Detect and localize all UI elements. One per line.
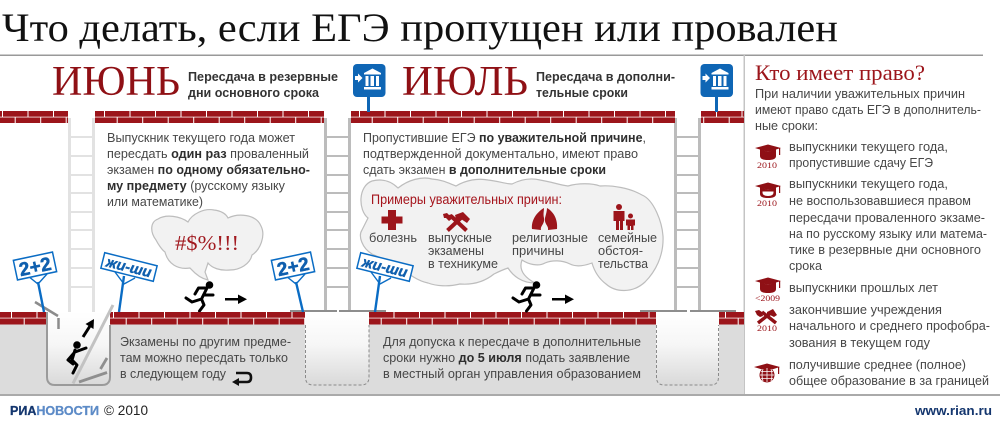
footer logo: РИАНОВОСТИ <box>10 403 99 418</box>
side intro: При наличии уважительных причин <box>755 86 965 101</box>
text block: July intro: Пропустившие ЕГЭ по уважительной причине, <box>363 130 646 145</box>
reason: family <box>598 230 657 271</box>
open hatch covers <box>290 310 736 312</box>
pit walls <box>47 312 110 385</box>
icon: education office sign 2 <box>700 64 733 112</box>
text block: June: или математике) <box>107 194 203 209</box>
June subtitle <box>188 70 338 100</box>
footer logo <box>10 403 148 418</box>
arrow 1 <box>225 294 247 304</box>
speech cloud: swearing <box>152 210 263 280</box>
text block: July intro: сдать экзамен в дополнительные сроки <box>363 162 606 177</box>
item: abroad: получившие среднее (полное) <box>789 357 966 372</box>
item: vocational: зования в текущем году <box>789 335 930 350</box>
icon: hammers 2010 <box>755 309 777 333</box>
reason: religious: причины <box>512 243 564 258</box>
item: unused right: пересдачи проваленного экзаме- <box>789 210 985 225</box>
title: Что делать, если ЕГЭ пропущен или провален <box>2 5 838 50</box>
item: unused right: на по русскому языку или матема- <box>789 226 987 241</box>
item: abroad <box>789 357 989 388</box>
text block: June: Выпускник текущего года может <box>107 130 295 145</box>
June subtitle: дни основного срока <box>188 86 320 100</box>
pit 3: dashed <box>656 312 719 385</box>
item: vocational: закончившие учреждения <box>789 302 942 317</box>
icon: cap 2010: 2010 <box>757 161 777 170</box>
bottom brick wall <box>0 312 744 324</box>
footer logo: © 2010 <box>104 403 148 418</box>
top brick wall <box>0 111 744 123</box>
reason: religious <box>512 230 588 258</box>
heading: June: ИЮНЬ <box>52 59 180 105</box>
icon: cross <box>382 210 402 230</box>
reason: technical school exams <box>428 230 498 271</box>
reason: religious: религиозные <box>512 230 588 245</box>
icon: return arrow <box>232 373 251 386</box>
text block: admission: Для допуска к пересдаче в дополнительные <box>383 334 641 349</box>
runner 2 <box>513 281 540 311</box>
sign: жи-ши left <box>101 253 157 312</box>
icon: hammers 2010: 2010 <box>757 324 777 333</box>
item: unused right: срока <box>789 258 823 273</box>
ladder: right <box>676 118 700 311</box>
icon: family <box>614 204 635 230</box>
arrow 2 <box>552 294 574 304</box>
item: unused right: выпускники текущего года, <box>789 176 948 191</box>
swearing text: #$%!!! <box>175 231 239 255</box>
side intro <box>755 86 981 133</box>
text block: admission: сроки нужно до 5 июля подать заявление <box>383 350 630 365</box>
text block: July intro: подтвержденной документально, имеют право <box>363 146 638 161</box>
text block: admission <box>383 334 641 381</box>
item: vocational <box>789 302 990 350</box>
reason: technical school exams: выпускные <box>428 230 492 245</box>
side intro: ные сроки: <box>755 118 818 133</box>
July subtitle: тельные сроки <box>536 86 628 100</box>
pit 2: dashed <box>305 312 369 385</box>
sign: 2+2 left: 2+2 <box>17 254 53 281</box>
item: unused right: тике в резервные дни основного <box>789 242 981 257</box>
item: unused right <box>789 176 987 273</box>
sign: жи-ши right <box>357 253 413 312</box>
icon: cap with blank 2010 <box>755 182 781 208</box>
sign: 2+2 left <box>13 252 57 312</box>
icon: hammers <box>443 212 470 230</box>
reason: family: обстоя- <box>598 243 643 258</box>
ground strip <box>0 324 744 394</box>
sign: 2+2 right: 2+2 <box>275 254 311 281</box>
text block: other subjects: Экзамены по другим предме- <box>120 334 291 349</box>
text block: June: экзамен по одному обязательно- <box>107 162 310 177</box>
heading: July: ИЮЛЬ <box>402 59 528 105</box>
July subtitle: Пересдача в дополни- <box>536 70 675 84</box>
icon: cap before 2009: <2009 <box>755 294 780 303</box>
speech cloud: valid reasons <box>360 178 663 290</box>
item: missed exam: пропустившие сдачу ЕГЭ <box>789 155 933 170</box>
cloud heading: Примеры уважительных причин: <box>371 192 562 207</box>
icon: cap with globe <box>754 364 780 382</box>
icon: cap with blank 2010: 2010 <box>757 199 777 208</box>
text block: June: пересдать один раз проваленный <box>107 146 309 161</box>
reason: illness: болезнь <box>369 230 417 245</box>
climbing figure <box>68 341 86 373</box>
icon: praying hands <box>532 208 557 230</box>
reason: family: тельства <box>598 256 649 271</box>
side heading: Кто имеет право? <box>755 60 925 85</box>
pit 1: open <box>47 312 110 385</box>
text block: other subjects <box>120 334 291 381</box>
icon: cap before 2009 <box>755 278 781 303</box>
text block: other subjects: там можно пересдать только <box>120 350 288 365</box>
text block: admission: в местный орган управления образованием <box>383 366 641 381</box>
ladder: middle <box>326 118 350 311</box>
icon: education office sign 1 <box>353 64 386 112</box>
icon: cap 2010 <box>755 144 781 170</box>
item: abroad: общее образование в за границей <box>789 373 989 388</box>
reason: family: семейные <box>598 230 657 245</box>
item: missed exam <box>789 139 948 170</box>
text block: June <box>107 130 310 209</box>
arrow up <box>83 319 94 337</box>
text block: other subjects: в следующем году <box>120 366 226 381</box>
footer url: www.rian.ru <box>914 403 992 418</box>
sign: 2+2 right <box>271 252 315 312</box>
June subtitle: Пересдача в резервные <box>188 70 338 84</box>
sign: жи-ши left: жи-ши <box>103 254 153 281</box>
reason: technical school exams: в техникуме <box>428 256 498 271</box>
pit lid and ladder <box>35 302 113 384</box>
item: vocational: начального и среднего профобра- <box>789 318 990 333</box>
item: past graduates: выпускники прошлых лет <box>789 280 938 295</box>
side intro: имеют право сдать ЕГЭ в дополнитель- <box>755 102 981 117</box>
ladder: left light <box>70 118 94 312</box>
item: missed exam: выпускники текущего года, <box>789 139 948 154</box>
sign: жи-ши right: жи-ши <box>359 254 409 281</box>
reason: technical school exams: экзамены <box>428 243 484 258</box>
text block: July intro <box>363 130 646 177</box>
runner 1 <box>186 281 213 311</box>
text block: June: му предмету (русскому языку <box>107 178 285 193</box>
July subtitle <box>536 70 675 100</box>
item: unused right: не воспользовавшиеся правом <box>789 193 971 208</box>
